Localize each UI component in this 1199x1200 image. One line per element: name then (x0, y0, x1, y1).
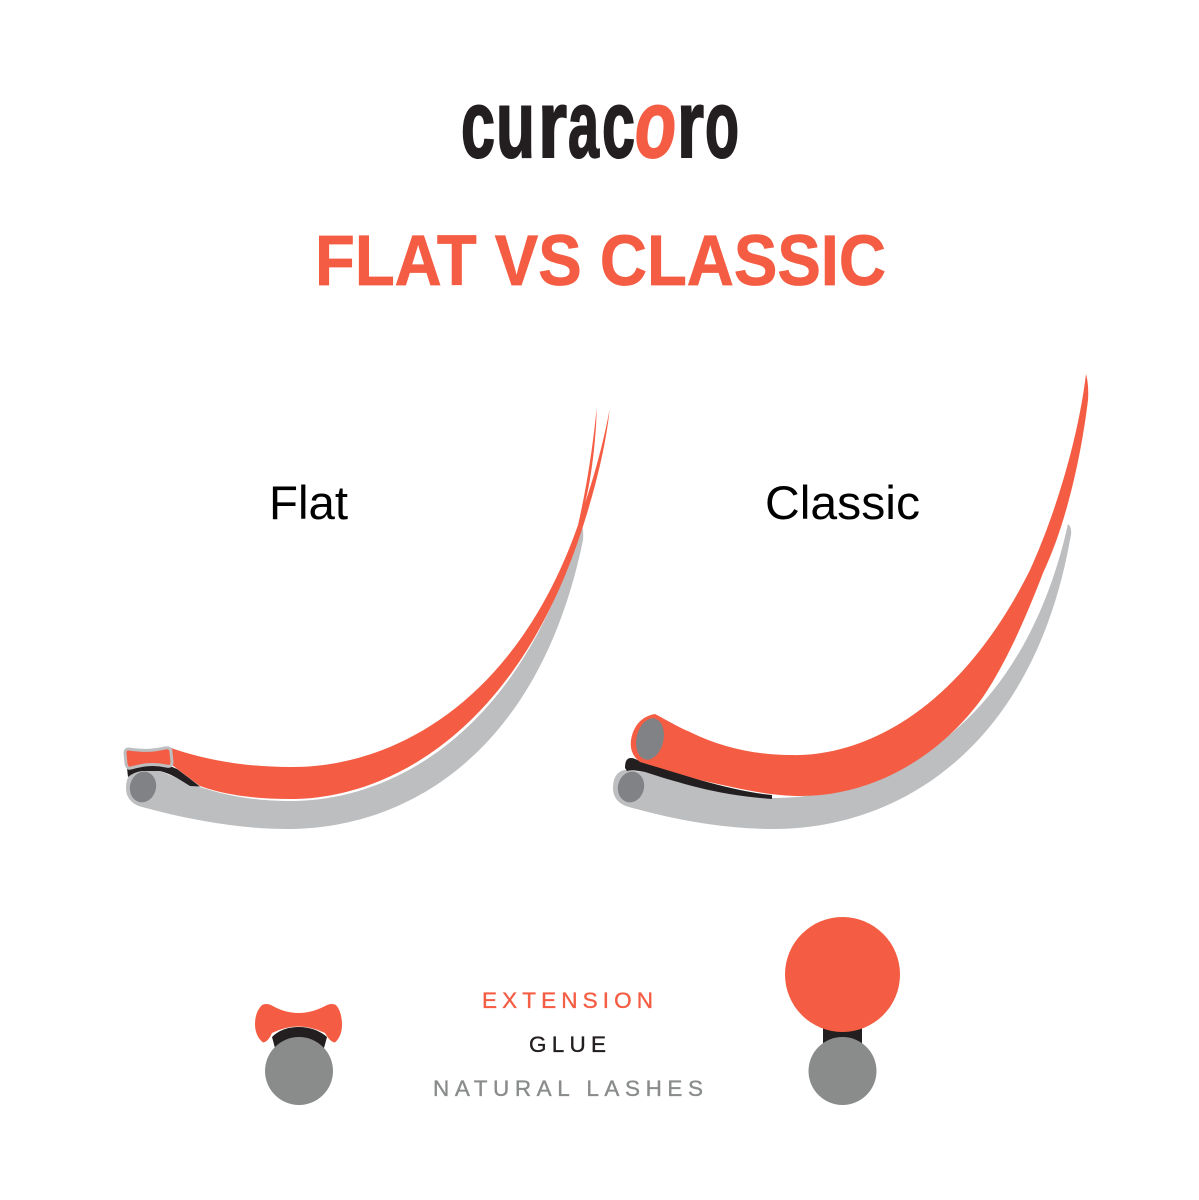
logo: curacoro: r (538, 71, 567, 178)
logo: curacoro: c (461, 71, 495, 178)
extension cross-section: classic (785, 917, 900, 1032)
glue cross-section: classic (823, 1025, 862, 1047)
glue cross-section: flat (272, 1027, 327, 1048)
legend (433, 988, 703, 1101)
logo: curacoro: o (635, 71, 676, 178)
logo: curacoro (461, 71, 739, 178)
cross-section: classic (785, 917, 900, 1105)
glue: classic (625, 758, 772, 799)
extension: classic (631, 374, 1088, 796)
natural lash: flat (126, 524, 583, 829)
natural lash: classic (613, 524, 1071, 829)
logo: curacoro: u (496, 71, 535, 178)
diagram: flat lash on natural lash (125, 408, 610, 829)
label: Flat: Flat (269, 476, 348, 529)
extension cross-section: flat (255, 1004, 342, 1042)
cross-section: flat (255, 1004, 342, 1105)
lash end: classic (614, 769, 648, 805)
diagram: classic lash on natural lash (613, 374, 1088, 829)
legend: glue: GLUE (529, 1032, 606, 1057)
natural lash cross-section: flat (265, 1037, 333, 1105)
legend: extension: EXTENSION (482, 988, 653, 1013)
glue: flat (127, 762, 200, 786)
logo: curacoro: a (568, 71, 599, 178)
legend: natural lashes: NATURAL LASHES (433, 1076, 703, 1101)
extension end: classic (632, 716, 668, 762)
label: Classic: Classic (765, 476, 920, 529)
title: FLAT VS CLASSIC (315, 222, 886, 301)
logo: curacoro: c (602, 71, 635, 178)
natural lash cross-section: classic (808, 1037, 876, 1105)
lash end: flat (126, 769, 160, 805)
logo: curacoro: r (677, 71, 704, 178)
extension: flat (168, 408, 610, 799)
logo: curacoro: o (705, 71, 739, 178)
flat cross-section (125, 748, 172, 768)
